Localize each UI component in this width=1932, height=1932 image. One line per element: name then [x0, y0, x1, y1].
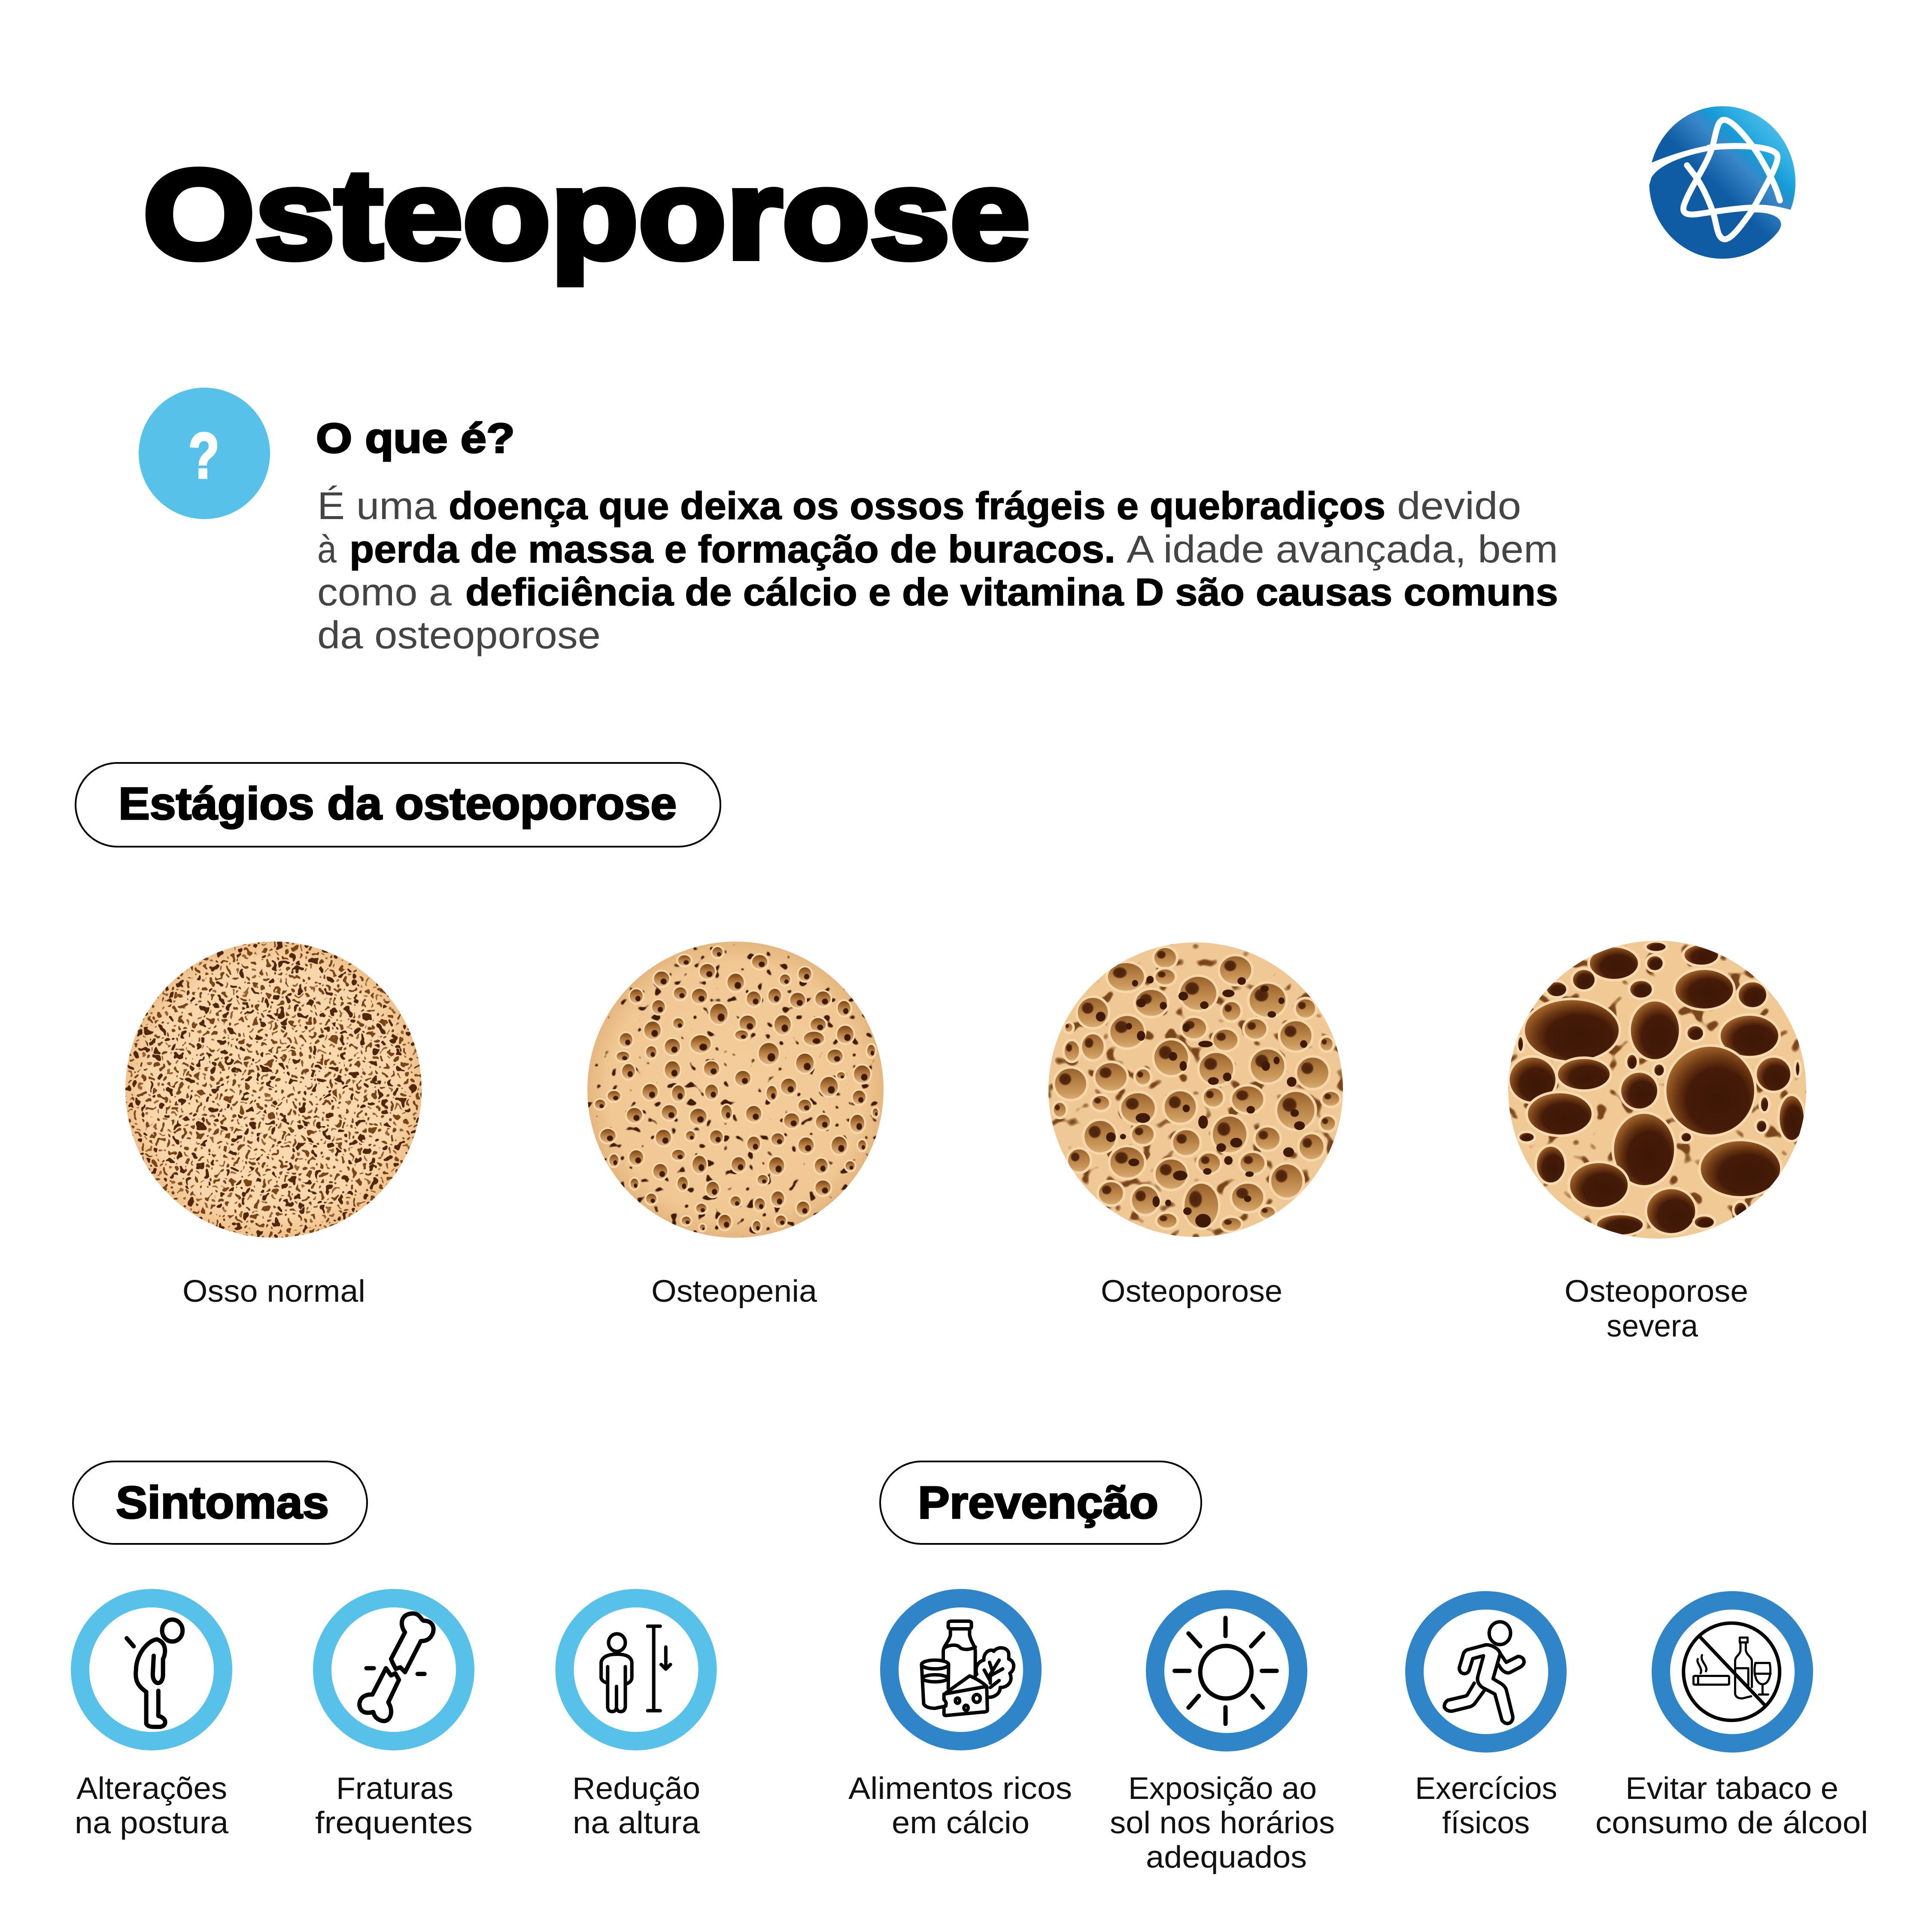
- label: [75, 1771, 229, 1840]
- heading pill: Estágios da osteoporose: [76, 763, 720, 847]
- label: Evitar tabaco e: [1625, 1771, 1838, 1806]
- label: Redução: [572, 1771, 700, 1806]
- icon: height reduction: [565, 1598, 708, 1741]
- image: severe osteoporosis bone texture: [1508, 941, 1806, 1239]
- heading: O que é?: O que é?: [316, 415, 515, 462]
- label: [848, 1771, 1072, 1840]
- symptom: fraturas frequentes: [315, 1598, 473, 1840]
- label: Osteoporose severa: severa: [1607, 1309, 1698, 1343]
- label: Alimentos ricos: [848, 1771, 1072, 1806]
- text block: definition: como a: [317, 571, 452, 614]
- icon: broken bone: [322, 1598, 465, 1741]
- label: adequados: [1146, 1840, 1307, 1874]
- icon: runner: [1414, 1601, 1558, 1743]
- label: Exposição ao: [1128, 1771, 1317, 1806]
- image: normal bone texture: [125, 942, 422, 1238]
- text block: definition: É uma: [317, 485, 437, 528]
- heading pill: Prevenção: Prevenção: [918, 1477, 1158, 1528]
- label: sol nos horários: [1110, 1806, 1335, 1840]
- icon: milk cheese and greens: [890, 1598, 1032, 1741]
- text block: definition: da osteoporose: [317, 614, 601, 657]
- symptom: redução na altura: [565, 1598, 708, 1840]
- text block: definition: doença que deixa os ossos frágeis e quebradiços: [449, 485, 1385, 528]
- label: Exercícios: [1415, 1771, 1557, 1806]
- logo: [1643, 106, 1806, 263]
- label: Alterações: [76, 1771, 227, 1806]
- prevention: exposição ao sol: [1110, 1599, 1335, 1874]
- label: Osteoporose severa: [1564, 1274, 1748, 1343]
- panel: osteoporose: [1048, 942, 1343, 1309]
- text block: definition: à: [317, 528, 337, 571]
- label: físicos: [1442, 1806, 1530, 1840]
- label: na altura: [573, 1806, 700, 1840]
- icon: sun: [1155, 1599, 1298, 1742]
- prevention: evitar tabaco e álcool: [1595, 1601, 1868, 1840]
- panel: osteopenia: [587, 942, 884, 1309]
- label: na postura: [75, 1806, 229, 1840]
- icon: question mark: ?: [188, 419, 219, 492]
- label: [1110, 1771, 1335, 1874]
- text block: definition: [317, 485, 1558, 657]
- image: osteopenia bone texture: [587, 942, 884, 1238]
- icon: stooped posture: [80, 1598, 223, 1741]
- icon: no smoking or alcohol: [1661, 1601, 1804, 1743]
- label: em cálcio: [892, 1806, 1030, 1840]
- symptom: alterações na postura: [75, 1598, 229, 1840]
- label: Osteoporose severa: Osteoporose: [1564, 1274, 1748, 1309]
- label: Fraturas: [336, 1771, 453, 1806]
- title: Osteoporose: [143, 143, 1030, 286]
- image: osteoporosis bone texture: [1048, 942, 1343, 1237]
- text block: definition: deficiência de cálcio e de vitamina D são causas comuns: [465, 571, 1558, 614]
- heading pill: Sintomas: [73, 1461, 367, 1544]
- label: Osso normal: Osso normal: [182, 1274, 365, 1309]
- text block: definition: devido: [1397, 485, 1521, 528]
- panel: osteoporose severa: [1508, 941, 1806, 1343]
- prevention: exercícios físicos: [1414, 1601, 1558, 1840]
- label: [315, 1771, 473, 1840]
- label: [1595, 1771, 1868, 1840]
- label: [572, 1771, 700, 1840]
- text block: definition: perda de massa e formação de buracos.: [349, 528, 1115, 571]
- icon: question mark: [139, 388, 270, 519]
- heading pill: Prevenção: [880, 1461, 1201, 1544]
- label: Osteopenia: Osteopenia: [651, 1274, 817, 1309]
- heading pill: Estágios da osteoporose: Estágios da osteoporose: [118, 778, 677, 829]
- label: frequentes: [315, 1806, 473, 1840]
- heading pill: Sintomas: Sintomas: [116, 1477, 329, 1528]
- label: consumo de álcool: [1595, 1806, 1868, 1840]
- panel: osso normal: [112, 929, 434, 1309]
- label: [1415, 1771, 1557, 1840]
- label: Osteoporose: Osteoporose: [1101, 1274, 1282, 1309]
- text block: definition: A idade avançada, bem: [1127, 528, 1558, 571]
- prevention: alimentos ricos em cálcio: [848, 1598, 1072, 1840]
